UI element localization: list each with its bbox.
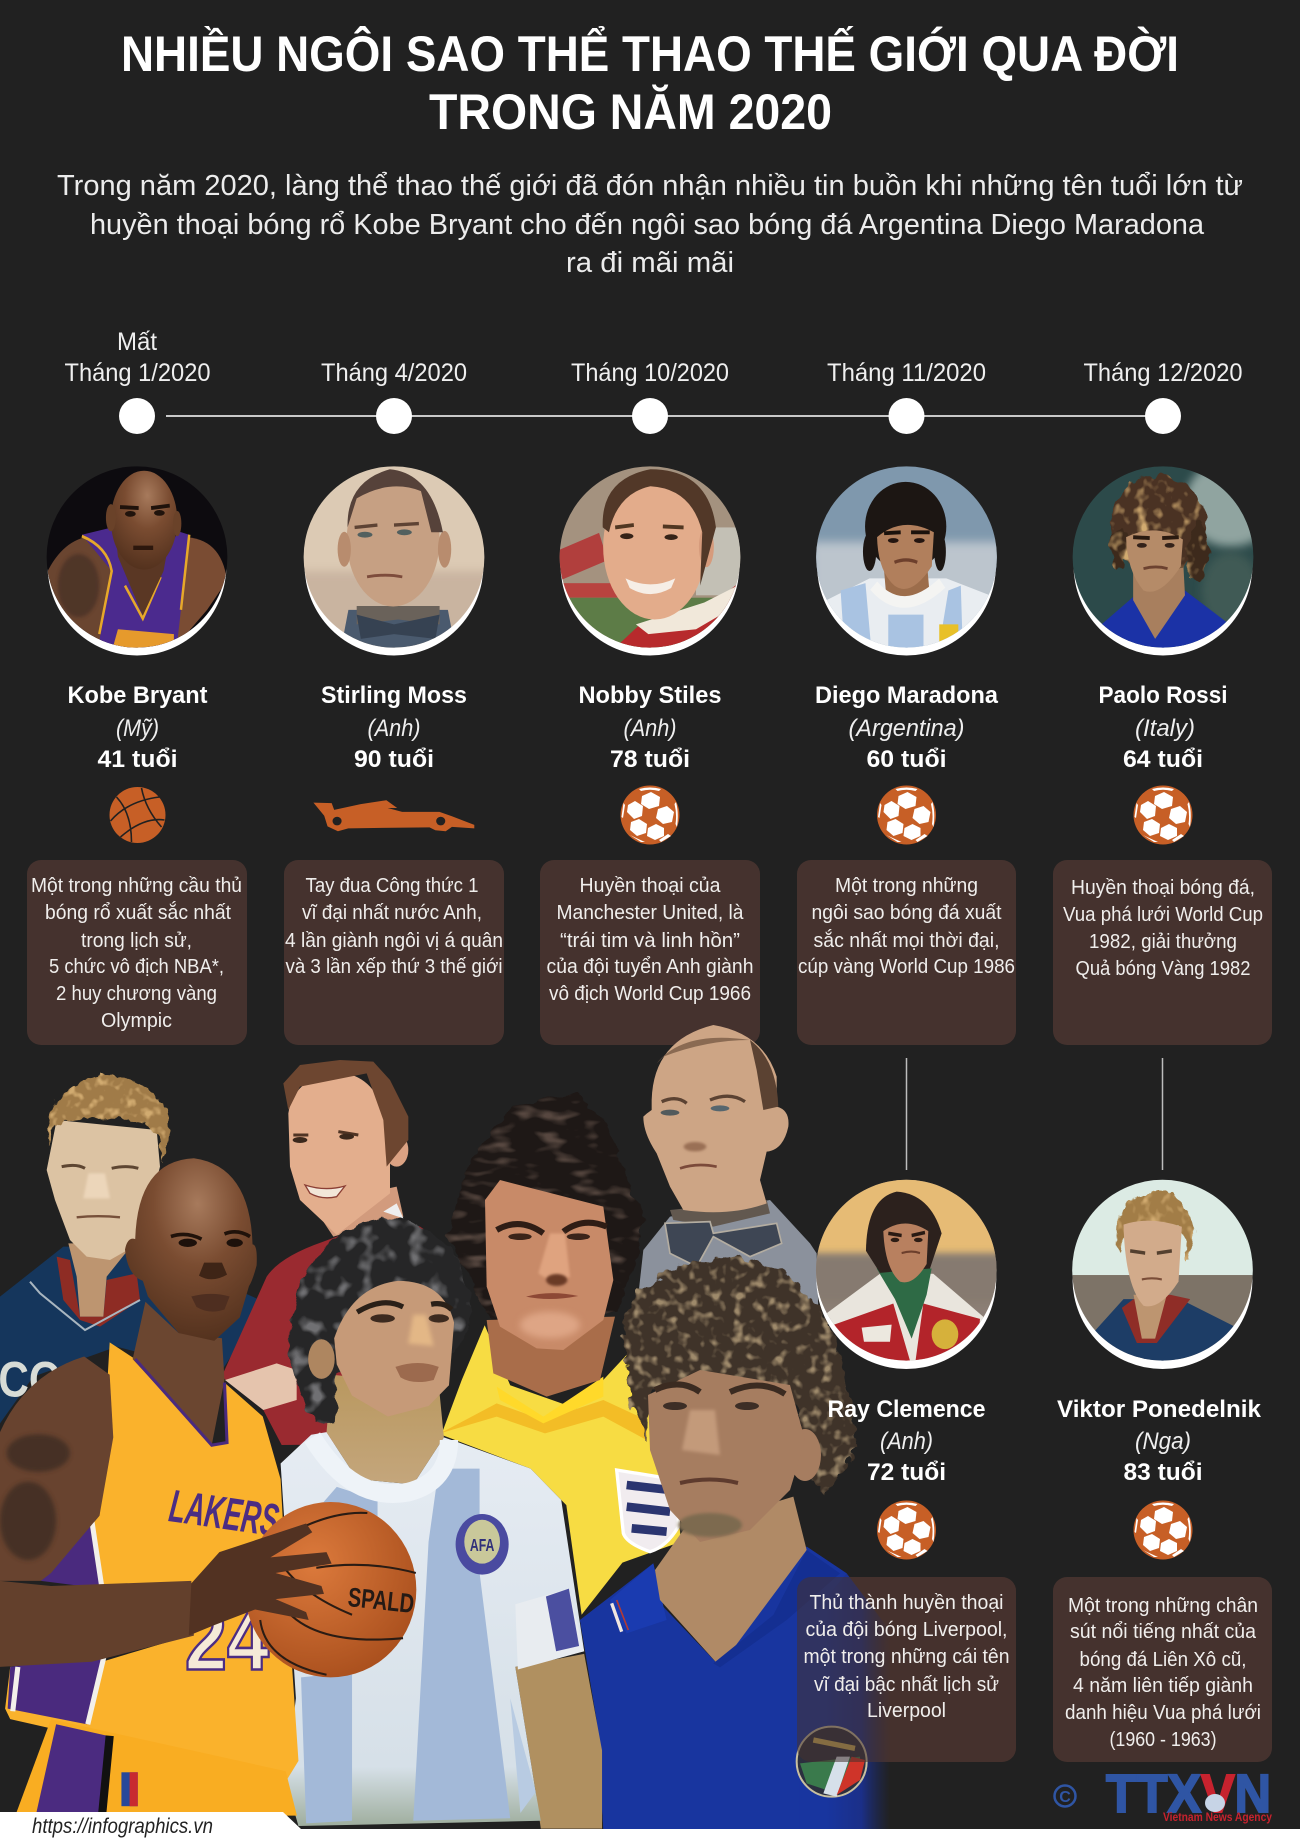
- logo: copyright mark: C: [1059, 1789, 1071, 1806]
- Nobby Stiles label: (Anh): [624, 715, 676, 742]
- collage: Nobby Stiles: [222, 1060, 430, 1445]
- timeline label: Mất Tháng 1/2020: Mất: [117, 328, 157, 356]
- card overlay: Ray Clemence: Liverpool: [867, 1700, 946, 1722]
- Viktor Ponedelnik label: [1057, 1396, 1262, 1486]
- logo: TTXVN: Vietnam News Agency: [1163, 1812, 1273, 1824]
- card: Nobby Stiles: Manchester United, là: [556, 902, 744, 924]
- card: Viktor Ponedelnik: 4 năm liên tiếp giành: [1073, 1675, 1253, 1697]
- card: Kobe Bryant: 2 huy chương vàng: [56, 983, 217, 1005]
- card: Viktor Ponedelnik: bóng đá Liên Xô cũ,: [1080, 1649, 1246, 1671]
- card: Nobby Stiles: Huyền thoại của: [580, 875, 721, 897]
- portrait: Viktor Ponedelnik: [1070, 1176, 1257, 1372]
- Paolo Rossi label: 64 tuổi: [1123, 746, 1203, 773]
- card: Paolo Rossi: Vua phá lưới World Cup: [1063, 904, 1263, 926]
- card: Kobe Bryant: bóng rổ xuất sắc nhất: [45, 901, 231, 924]
- card: Diego Maradona: ngôi sao bóng đá xuất: [812, 902, 1002, 924]
- person labels: first row: [68, 682, 1228, 773]
- timeline label: Mất Tháng 1/2020: Tháng 1/2020: [64, 359, 210, 387]
- icon: soccer ball Diego: [877, 786, 936, 844]
- collage: Kobe Bryant: [0, 1158, 416, 1816]
- icon: basketball: [110, 787, 166, 843]
- collage: Paolo Rossi: [580, 1255, 990, 1829]
- card: Diego Maradona: Một trong những: [835, 875, 978, 897]
- card overlay: Ray Clemence: một trong những cái tên: [804, 1646, 1010, 1668]
- collage: basketball: SPALD: [346, 1582, 416, 1619]
- card: Stirling Moss: [284, 860, 504, 1045]
- card: Viktor Ponedelnik: danh hiệu Vua phá lưới: [1065, 1702, 1261, 1724]
- intro text: Trong năm 2020, làng thể thao thế giới đã đón nhận nhiều tin buồn khi những tên tuổi lớn từ: [57, 170, 1243, 202]
- Ray Clemence label: 72 tuổi: [867, 1459, 946, 1486]
- card: Paolo Rossi: [1053, 860, 1272, 1045]
- collage: Viktor Ponedelnik: [0, 1076, 260, 1423]
- title: [121, 25, 1179, 140]
- Diego Maradona label: 60 tuổi: [866, 746, 946, 773]
- timeline label: Mất Tháng 1/2020: [64, 328, 210, 387]
- icon: soccer ball Viktor: [1134, 1500, 1192, 1560]
- portrait: Nobby Stiles: [560, 466, 740, 656]
- icon: soccer ball Ray: [877, 1500, 936, 1560]
- Kobe Bryant label: (Mỹ): [116, 715, 159, 742]
- intro text: huyền thoại bóng rổ Kobe Bryant cho đến ngôi sao bóng đá Argentina Diego Maradona: [90, 209, 1205, 241]
- Nobby Stiles label: [578, 682, 722, 773]
- portrait: Stirling Moss: [304, 466, 484, 656]
- timeline label: Tháng 12/2020: Tháng 12/2020: [1084, 359, 1242, 387]
- card: Kobe Bryant: Một trong những cầu thủ: [31, 875, 242, 897]
- card: Diego Maradona: [797, 860, 1016, 1045]
- logo: TTXVN: TTXVN: [1106, 1764, 1271, 1824]
- collage: Kobe Bryant: 24: [185, 1590, 269, 1689]
- Nobby Stiles label: 78 tuổi: [610, 746, 690, 773]
- Paolo Rossi label: [1098, 682, 1228, 773]
- timeline dots: [119, 398, 1181, 434]
- Stirling Moss label: (Anh): [368, 715, 420, 742]
- card: Diego Maradona: sắc nhất mọi thời đại,: [814, 929, 1000, 952]
- card: Kobe Bryant: [27, 860, 247, 1045]
- Ray Clemence label: Ray Clemence: [828, 1396, 986, 1423]
- timeline label: Tháng 4/2020: Tháng 4/2020: [321, 359, 467, 387]
- collage: basketball: [245, 1502, 416, 1677]
- card: Nobby Stiles: của đội tuyển Anh giành: [546, 956, 754, 978]
- card: Kobe Bryant: Olympic: [101, 1010, 172, 1032]
- icon: soccer ball Nobby: [620, 786, 680, 844]
- collage: AFA badge: [456, 1514, 509, 1575]
- icon: soccer ball Paolo: [1134, 786, 1192, 844]
- card overlay: Ray Clemence: của đội bóng Liverpool,: [806, 1619, 1008, 1641]
- card: Kobe Bryant: trong lịch sử,: [81, 930, 192, 952]
- Diego Maradona label: (Argentina): [848, 715, 964, 742]
- Nobby Stiles label: Nobby Stiles: [578, 682, 722, 709]
- intro text: [57, 170, 1243, 279]
- Paolo Rossi label: (Italy): [1135, 715, 1195, 742]
- card: Paolo Rossi: 1982, giải thưởng: [1089, 931, 1237, 953]
- card: Paolo Rossi: Quả bóng Vàng 1982: [1076, 958, 1250, 980]
- title: TRONG NĂM 2020: [429, 84, 832, 140]
- card: Nobby Stiles: vô địch World Cup 1966: [549, 983, 751, 1005]
- card: Viktor Ponedelnik: sút nổi tiếng nhất của: [1070, 1621, 1257, 1643]
- Stirling Moss label: 90 tuổi: [354, 746, 434, 773]
- icon: racing car: [313, 800, 474, 831]
- collage: AFA badge: AFA: [470, 1535, 495, 1555]
- Ray Clemence label: [828, 1396, 986, 1486]
- title: NHIỀU NGÔI SAO THỂ THAO THẾ GIỚI QUA ĐỜI: [121, 25, 1179, 82]
- portrait: Ray Clemence: [813, 1172, 1000, 1369]
- Paolo Rossi label: Paolo Rossi: [1098, 682, 1228, 709]
- Diego Maradona label: Diego Maradona: [815, 682, 999, 709]
- collage: Stirling Moss: [637, 1025, 818, 1310]
- connector lines to second row: [906, 1058, 1162, 1170]
- card: Viktor Ponedelnik: Một trong những chân: [1068, 1595, 1258, 1617]
- card: Viktor Ponedelnik: [1053, 1577, 1272, 1762]
- card: Stirling Moss: vĩ đại nhất nước Anh,: [302, 902, 482, 924]
- card: Nobby Stiles: “trái tim và linh hồn”: [560, 930, 740, 952]
- collage: Ray Clemence: [440, 1093, 681, 1615]
- card: Diego Maradona: cúp vàng World Cup 1986: [798, 956, 1015, 978]
- collage: Diego Maradona: [281, 1218, 602, 1829]
- person labels: second row: [828, 1396, 1262, 1486]
- card: Stirling Moss: 4 lần giành ngôi vị á quân: [285, 930, 503, 952]
- collage: Italia shoulder badge: [797, 1727, 867, 1797]
- Stirling Moss label: Stirling Moss: [321, 682, 467, 709]
- card: Viktor Ponedelnik: (1960 - 1963): [1110, 1729, 1216, 1751]
- footer strip: https://infographics.vn: [32, 1815, 213, 1838]
- logo: copyright mark: [1054, 1786, 1076, 1806]
- Kobe Bryant label: Kobe Bryant: [68, 682, 208, 709]
- card base: Ray Clemence: [797, 1577, 1016, 1762]
- card: Nobby Stiles: [540, 860, 760, 1045]
- collage: Viktor Ponedelnik: CO: [0, 1352, 62, 1408]
- card overlay: Ray Clemence: Thủ thành huyền thoại: [810, 1592, 1004, 1614]
- Viktor Ponedelnik label: 83 tuổi: [1124, 1459, 1202, 1486]
- photo collage of athletes: [0, 1025, 990, 1829]
- Viktor Ponedelnik label: Viktor Ponedelnik: [1057, 1396, 1262, 1423]
- intro text: ra đi mãi mãi: [566, 247, 734, 279]
- Viktor Ponedelnik label: (Nga): [1135, 1428, 1191, 1455]
- collage: England badge: [617, 1470, 678, 1552]
- footer strip: [0, 1812, 1300, 1838]
- Kobe Bryant label: [68, 682, 208, 773]
- timeline label: Tháng 11/2020: Tháng 11/2020: [827, 359, 986, 387]
- card: Kobe Bryant: 5 chức vô địch NBA*,: [49, 956, 224, 978]
- card: Stirling Moss: và 3 lần xếp thứ 3 thế giới: [286, 956, 502, 978]
- portrait: Diego Maradona: [812, 460, 1002, 656]
- timeline: [64, 328, 1242, 434]
- card: Paolo Rossi: Huyền thoại bóng đá,: [1071, 877, 1255, 899]
- Kobe Bryant label: 41 tuổi: [98, 746, 178, 773]
- Diego Maradona label: [815, 682, 999, 773]
- Ray Clemence label: (Anh): [880, 1428, 933, 1455]
- card: Stirling Moss: Tay đua Công thức 1: [306, 875, 478, 897]
- portrait: Paolo Rossi: [1072, 466, 1254, 656]
- collage: Lakers jersey lettering: LAKERS: [166, 1480, 282, 1546]
- Stirling Moss label: [321, 682, 467, 773]
- card overlay: Ray Clemence: [797, 1577, 1016, 1762]
- timeline label: Tháng 10/2020: Tháng 10/2020: [571, 359, 729, 387]
- portrait: Kobe Bryant: [46, 466, 228, 656]
- card overlay: Ray Clemence: vĩ đại bậc nhất lịch sử: [814, 1674, 999, 1696]
